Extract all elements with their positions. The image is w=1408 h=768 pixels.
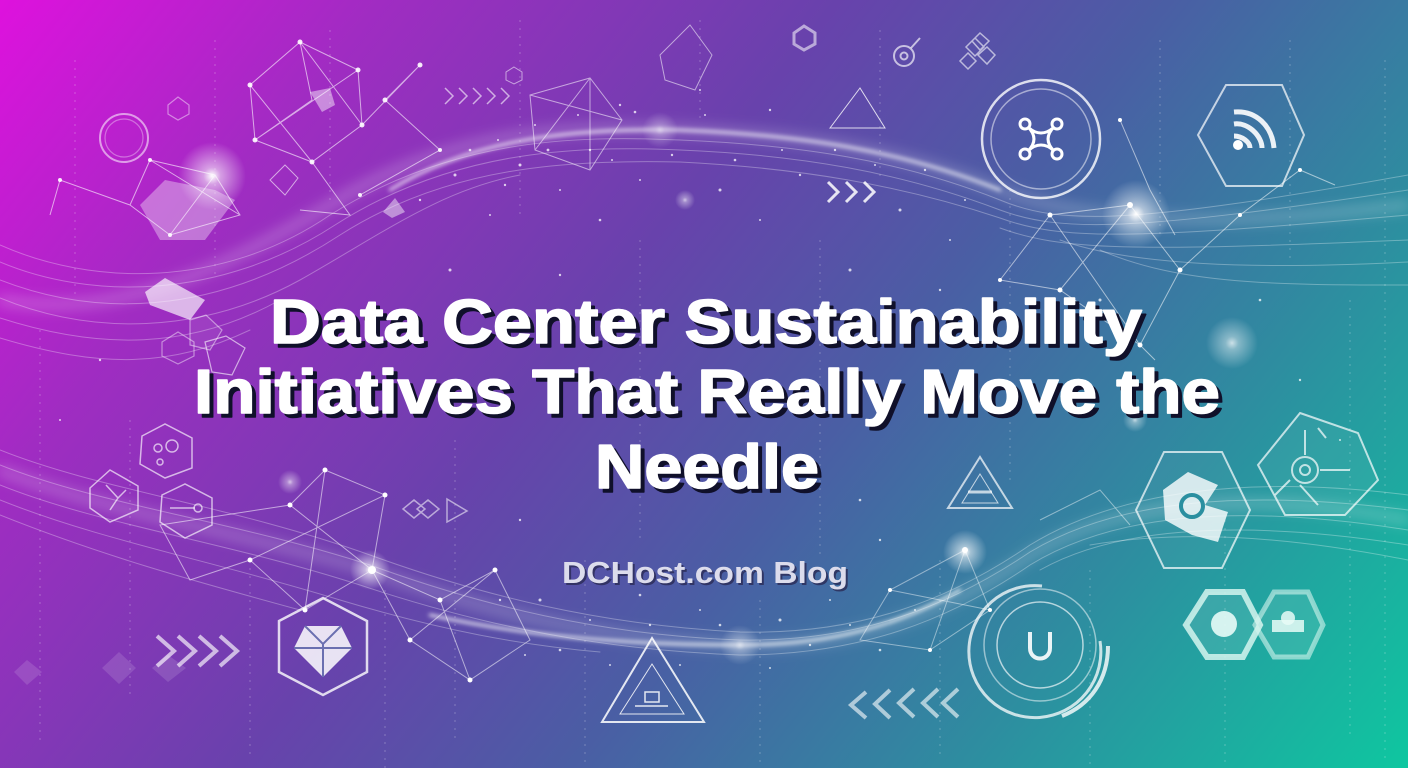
icon: twin hexagons	[1186, 592, 1323, 657]
subtitle: DCHost.com Blog	[564, 557, 850, 592]
icon: diamond cluster	[960, 33, 995, 69]
outline hexagons: left	[100, 97, 245, 375]
network constellation: upper center	[506, 25, 885, 170]
icon: gear hexagon right	[1136, 452, 1250, 568]
network constellation: upper left	[50, 40, 442, 237]
icon: concentric circular gauge	[969, 586, 1108, 718]
icon: triangle badge right	[948, 457, 1012, 508]
chevrons: centre	[828, 182, 874, 202]
title: Needle	[595, 433, 819, 502]
chevrons: bottom right pointing left	[851, 689, 958, 718]
chevrons: top center	[445, 88, 509, 104]
icon: triangle emblem bottom	[602, 638, 704, 722]
icon: circled network node	[982, 80, 1100, 198]
pale hexagons: bottom left	[14, 652, 186, 685]
title: Data Center Sustainability	[270, 288, 1143, 357]
title: Data Center Sustainability	[274, 292, 1147, 361]
icon: left side hexagon cluster	[90, 424, 212, 538]
icon: circuit hexagon far right	[1258, 413, 1378, 515]
network constellation: lower right	[860, 490, 1130, 652]
sparkle glows	[178, 112, 1258, 665]
scattered star particles	[59, 89, 1341, 669]
chevrons: lower left	[157, 636, 237, 666]
lower flowing light wave	[0, 450, 1408, 655]
translucent crystal shapes: left	[140, 88, 405, 320]
title	[194, 288, 1224, 506]
icon: wifi hexagon	[1198, 85, 1304, 186]
title: Initiatives That Really Move the	[198, 362, 1224, 431]
title: Needle	[599, 437, 823, 506]
icon: lower left triangle outlines	[403, 499, 467, 522]
upper flowing light wave	[0, 129, 1408, 360]
icon: link badge	[894, 38, 920, 66]
subtitle: DCHost.com Blog	[562, 555, 848, 590]
network constellation: lower left	[160, 468, 530, 682]
title: Initiatives That Really Move the	[194, 358, 1220, 427]
icon: gem hexagon	[279, 598, 367, 695]
network constellation: right	[998, 118, 1335, 360]
